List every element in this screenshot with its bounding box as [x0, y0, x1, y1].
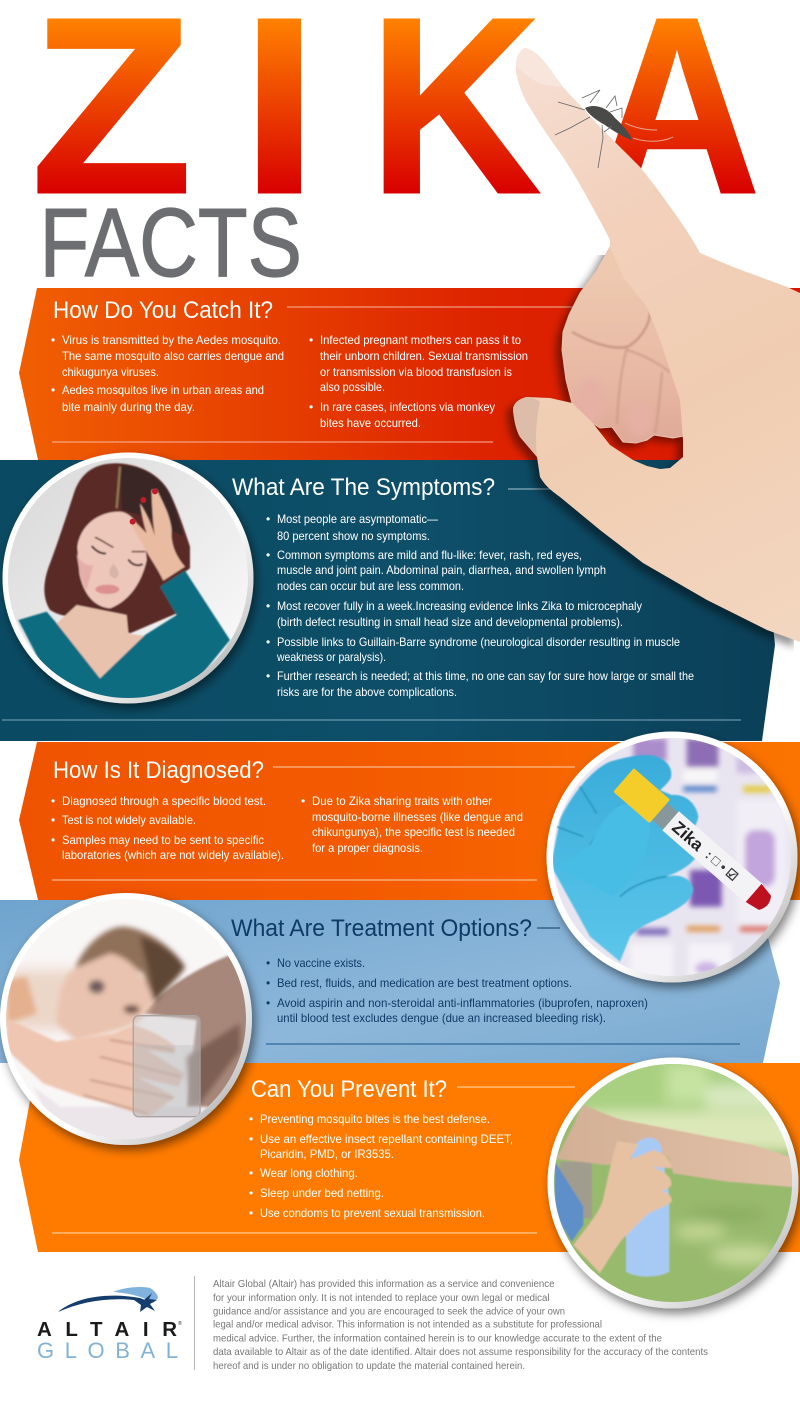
text block: diagnosed left column: Test is not widely available. [62, 813, 196, 827]
text block: prevent list: Wear long clothing. [260, 1166, 358, 1180]
text block: diagnosed left column: Samples may need to be sent to specific [62, 833, 264, 847]
photo: sick girl with glass of water [0, 890, 260, 1153]
text block: prevent list: Use an effective insect repellant containing DEET, [260, 1132, 513, 1146]
text block: catch left column: chikugunya viruses. [62, 365, 159, 379]
hand shadow on panels [502, 255, 794, 650]
text block: catch right column: their unborn children. Sexual transmission [320, 349, 528, 363]
photo: insect repellent sprayed on arm [540, 1048, 800, 1315]
text block: catch left column: • [51, 333, 55, 347]
footer: logo [37, 1287, 182, 1363]
text block: symptoms list: • [266, 548, 270, 562]
text block: symptoms list: Possible links to Guillain-Barre syndrome (neurological disorder resulting in muscle [277, 635, 680, 649]
text block: catch left column [51, 333, 284, 414]
text block: symptoms list: Most recover fully in a week.Increasing evidence links Zika to microcephaly [277, 599, 642, 613]
text block: catch right column [309, 333, 528, 430]
text block: catch right column: bites have occurred. [320, 416, 421, 430]
text block: disclaimer: for your information only. It is not intended to replace your own legal or medical [213, 1292, 550, 1304]
text block: prevent list: • [249, 1112, 253, 1126]
text block: symptoms list: Most people are asymptomatic— [277, 512, 438, 526]
footer: logo: GLOBAL [37, 1338, 178, 1363]
text block: prevent list: • [249, 1206, 253, 1220]
text block: symptoms list: nodes can occur but are less common. [277, 579, 464, 593]
text block: catch left column: Virus is transmitted by the Aedes mosquito. [62, 333, 281, 347]
text block: symptoms list: muscle and joint pain. Abdominal pain, diarrhea, and swollen lymph [277, 563, 606, 577]
text block: prevent list [249, 1112, 513, 1220]
text block: symptoms list: 80 percent show no symptoms. [277, 529, 430, 543]
footer: logo: ® [178, 1320, 182, 1327]
text block: diagnosed right column: Due to Zika sharing traits with other [312, 794, 492, 808]
text block: disclaimer: legal and/or medical advisor. This information is not intended as a substitute for professional [213, 1318, 602, 1330]
text block: disclaimer [213, 1278, 708, 1372]
panel: how do you catch it [19, 288, 800, 460]
text block: catch left column: bite mainly during the day. [62, 400, 195, 414]
text block: diagnosed left column: • [51, 813, 55, 827]
text block: treatment list [266, 956, 648, 1025]
text block: catch right column: In rare cases, infections via monkey [320, 400, 495, 414]
panel: can you prevent it [19, 1063, 800, 1252]
text block: catch right column: also possible. [320, 380, 385, 394]
text block: prevent list: Preventing mosquito bites is the best defense. [260, 1112, 490, 1126]
text block: symptoms list: • [266, 669, 270, 683]
text block: symptoms list [266, 512, 694, 699]
palm, index finger and thumb [513, 48, 800, 642]
text block: treatment list: Bed rest, fluids, and medication are best treatment options. [277, 976, 572, 990]
label: Zika on tube: Zika [668, 817, 708, 855]
text block: catch right column: or transmission via blood transfusion is [320, 365, 512, 379]
title: ZIKA [31, 0, 760, 247]
text block: symptoms list: weakness or paralysis). [276, 650, 386, 664]
text block: diagnosed right column: mosquito-borne illnesses (like dengue and [312, 810, 523, 824]
text block: catch left column: The same mosquito also carries dengue and [62, 349, 284, 363]
illustration: hand pointing with finger [513, 48, 800, 642]
text block: prevent list: • [249, 1186, 253, 1200]
heading: prevent: Can You Prevent It? [251, 1076, 447, 1103]
text block: treatment list: No vaccine exists. [277, 956, 365, 970]
panel: how is it diagnosed [19, 742, 800, 900]
text block: disclaimer: medical advice. Further, the information contained herein is to our knowledge accurate to the extent of the [213, 1332, 662, 1344]
text block: diagnosed right column: • [301, 794, 305, 808]
icon: logo swoosh and star [58, 1287, 158, 1312]
label: tube check boxes: : □ • ☑ [703, 848, 741, 884]
text block: symptoms list: risks are for the above complications. [277, 685, 457, 699]
text block: disclaimer: hereof and is under no obligation to update the material contained herein. [213, 1360, 525, 1372]
text block: symptoms list: (birth defect resulting in small head size and developmental problems). [277, 615, 623, 629]
text block: prevent list: • [249, 1132, 253, 1146]
text block: prevent list: Picaridin, PMD, or IR3535. [260, 1147, 394, 1161]
text block: treatment list: until blood test excludes dengue (due an increased bleeding risk). [277, 1011, 606, 1025]
footer: logo: ALTAIR [37, 1318, 177, 1341]
heading: treatment: What Are Treatment Options? [231, 915, 532, 942]
text block: catch right column: • [309, 400, 313, 414]
panel: what are treatment options [0, 900, 780, 1063]
text block: diagnosed left column [51, 794, 284, 862]
text block: diagnosed left column: laboratories (which are not widely available). [62, 848, 284, 862]
text block: catch left column: • [51, 383, 55, 397]
text block: treatment list: • [266, 976, 270, 990]
text block: prevent list: Use condoms to prevent sexual transmission. [260, 1206, 485, 1220]
text block: diagnosed left column: • [51, 794, 55, 808]
photo: woman with headache [0, 450, 260, 713]
text block: diagnosed left column: • [51, 833, 55, 847]
text block: diagnosed right column: chikungunya), the specific test is needed [312, 825, 515, 839]
text block: symptoms list: Further research is needed; at this time, no one can say for sure how large or small the [277, 669, 694, 683]
text block: prevent list: • [249, 1166, 253, 1180]
text block: catch left column: Aedes mosquitos live in urban areas and [62, 383, 264, 397]
heading: diagnosed: How Is It Diagnosed? [53, 757, 264, 784]
curled fingers [562, 247, 692, 443]
panel: what are the symptoms [0, 460, 775, 741]
text block: diagnosed right column: for a proper diagnosis. [312, 841, 423, 855]
text block: disclaimer: data available to Altair as of the date identified. Altair does not assume responsibility for the accuracy of the contents [213, 1346, 708, 1358]
text block: catch right column: • [309, 333, 313, 347]
heading: how do you catch it: How Do You Catch It? [53, 297, 273, 324]
text block: symptoms list: • [266, 635, 270, 649]
text block: prevent list: Sleep under bed netting. [260, 1186, 384, 1200]
text block: symptoms list: Common symptoms are mild and flu-like: fever, rash, red eyes, [277, 548, 582, 562]
text block: treatment list: • [266, 956, 270, 970]
text block: disclaimer: guidance and/or assistance and you are encouraged to seek the advice of your own [213, 1306, 565, 1318]
text block: disclaimer: Altair Global (Altair) has provided this information as a service and convenience [213, 1278, 555, 1290]
text block: diagnosed right column [301, 794, 523, 855]
icon: mosquito [555, 90, 673, 168]
icon: fingernail [516, 48, 562, 87]
text block: catch right column: Infected pregnant mothers can pass it to [320, 333, 521, 347]
icon: thumbnail [513, 397, 540, 457]
text block: treatment list: Avoid aspirin and non-steroidal anti-inflammatories (ibuprofen, naproxen) [277, 996, 648, 1010]
photo: gloved hand holding Zika test tube [540, 730, 800, 990]
subtitle: FACTS: FACTS [39, 188, 302, 297]
text block: symptoms list: • [266, 599, 270, 613]
text block: diagnosed left column: Diagnosed through a specific blood test. [62, 794, 266, 808]
text block: symptoms list: • [266, 512, 270, 526]
heading: symptoms: What Are The Symptoms? [232, 474, 495, 501]
text block: treatment list: • [266, 996, 270, 1010]
